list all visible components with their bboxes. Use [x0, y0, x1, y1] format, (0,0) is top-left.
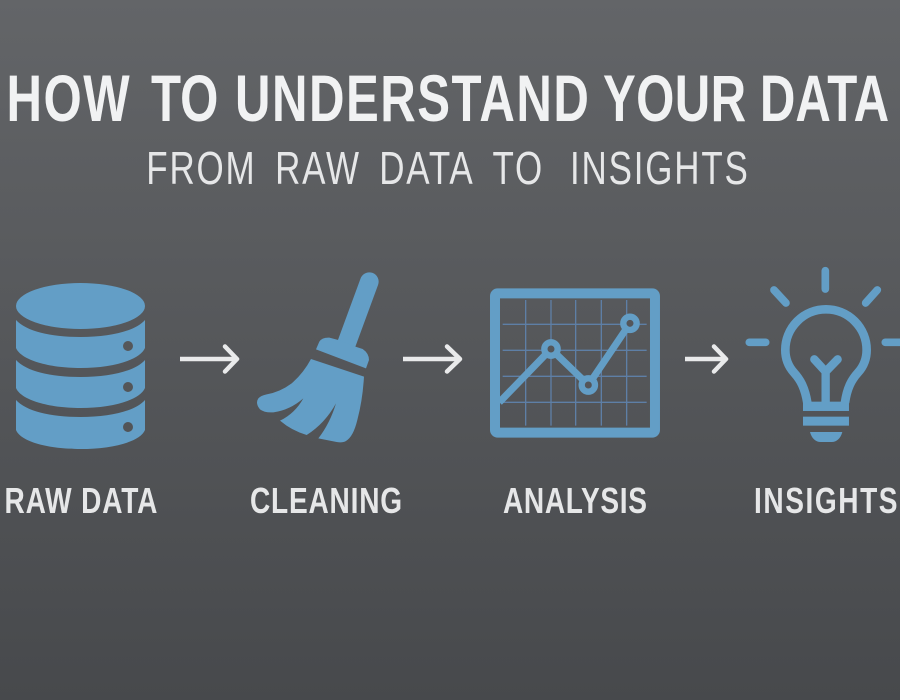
arrow: raw data to cleaning [180, 346, 237, 372]
title: DATA [760, 62, 889, 136]
label: raw data: RAW DATA [4, 481, 157, 521]
subtitle: INSIGHTS [570, 142, 750, 194]
bulb rays [749, 271, 900, 342]
icon: light bulb [749, 271, 900, 442]
chart frame [495, 293, 655, 433]
title: UNDERSTAND [235, 62, 590, 136]
arrow: analysis to insights [685, 346, 726, 372]
chart markers [544, 317, 637, 392]
icon: line chart [495, 293, 655, 433]
subtitle: FROM [146, 142, 256, 194]
icon: database [16, 283, 145, 449]
chart grid [503, 300, 647, 426]
arrow: cleaning to analysis [403, 346, 460, 372]
subtitle: DATA [379, 142, 475, 194]
title: YOUR [603, 62, 747, 136]
icon: broom [257, 282, 369, 442]
chart line [499, 323, 630, 402]
title: TO [151, 62, 218, 136]
bulb filament [814, 359, 838, 403]
bulb outline [785, 309, 867, 403]
label: cleaning: CLEANING [250, 481, 402, 521]
label: insights: INSIGHTS [754, 481, 898, 521]
label: analysis: ANALYSIS [503, 481, 647, 521]
subtitle: TO [492, 142, 544, 194]
bulb base [803, 402, 849, 442]
title: HOW [6, 62, 131, 136]
subtitle: RAW [275, 142, 361, 194]
